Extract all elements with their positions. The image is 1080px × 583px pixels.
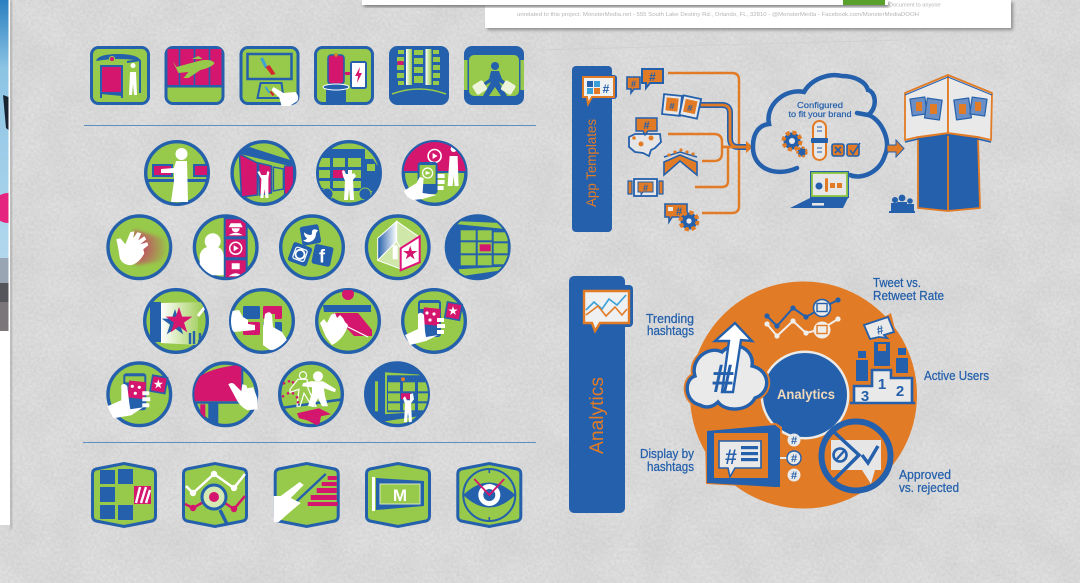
icon: display by hashtags: # [725, 446, 737, 469]
hexagon icon: hand and bars [274, 464, 338, 526]
circle icon: building grid [446, 215, 510, 279]
divider lines [83, 125, 536, 443]
cloud caption [788, 100, 852, 119]
icon: touch screen brush [241, 48, 298, 106]
icon: chat bubbles [627, 69, 663, 93]
circle icon: waving hand [108, 216, 171, 279]
circle icon: bus with person [317, 142, 381, 204]
kiosk tower [905, 75, 992, 211]
labels: analytics metrics [640, 276, 989, 495]
icon: US map with bubble [629, 118, 661, 156]
icon: audience [889, 195, 915, 213]
circle icon: locker wall with person [365, 362, 429, 426]
panel: Analytics sidebar [569, 276, 633, 513]
icon: users podium: 1 [878, 376, 886, 393]
icon: landscape phone: # [643, 183, 648, 193]
icon: bubble and gear: # [676, 206, 682, 218]
labels: analytics metrics: Trending [646, 312, 694, 326]
icon: trending cloud [687, 323, 767, 409]
labels: analytics metrics: hashtags [647, 460, 694, 474]
circle icon: person at large doors [232, 142, 295, 204]
icon: display by hashtags: # [791, 453, 797, 465]
icon: airplane [166, 48, 223, 104]
circle icon: phone with star cards, second [107, 363, 171, 426]
icon: crowd film strip [664, 148, 697, 175]
labels: analytics metrics: Active Users [924, 369, 989, 383]
icon: chat bubbles: # [631, 79, 636, 89]
arrow into cloud [746, 141, 753, 153]
cloud: configured to fit your brand [753, 75, 887, 176]
icon: lockers wall [390, 48, 448, 104]
labels: analytics metrics: Display by [640, 447, 695, 461]
hexagon icon: magnified chart [184, 464, 246, 526]
circle icon: projected star [145, 290, 208, 352]
circle icon: open cube with star panel [366, 216, 429, 279]
icon: approved versus rejected [822, 422, 890, 490]
analytics wheel [687, 282, 917, 508]
icon: display by hashtags: # [791, 435, 797, 447]
icon: trending cloud: # [712, 357, 734, 401]
circle icon: card insert [317, 288, 379, 352]
top documents [362, 0, 1013, 30]
circle icon: social media tiles: f [319, 246, 326, 266]
labels: analytics metrics: Approved [899, 468, 951, 482]
hexagon icon: checker grid [92, 464, 156, 526]
icon: bus shelter [92, 48, 148, 104]
icon: display by hashtags: # [791, 470, 797, 482]
App Templates title: App Templates [583, 119, 599, 207]
icon: display by hashtags [705, 423, 801, 488]
icon: US map with bubble: # [643, 120, 650, 132]
left document edge [0, 0, 12, 530]
Analytics title: Analytics [587, 377, 608, 454]
icon: users podium: # [875, 322, 885, 338]
circle icon: person with video strip [194, 215, 257, 279]
circle icon: social media tiles [281, 216, 343, 279]
icon: polaroid photos: # [687, 103, 693, 113]
icon: landscape phone [628, 179, 663, 196]
circle icon: dancing figures [279, 363, 343, 426]
cloud caption: to fit your brand [788, 109, 852, 119]
circle icon: person at display [145, 142, 209, 204]
icon: laptop [790, 171, 849, 208]
labels: analytics metrics: vs. rejected [899, 481, 959, 495]
panel: App Templates sidebar: # [603, 82, 610, 96]
hexagon icon: eye and clock [458, 464, 521, 526]
circle icon: phone video [403, 141, 467, 204]
arrow to kiosk [887, 140, 904, 157]
hexagon icon: framed M [366, 464, 430, 526]
icon: users podium: 3 [861, 388, 869, 405]
icon: polaroid photos: # [669, 101, 675, 111]
icon: chat bubbles: # [649, 70, 656, 84]
icon: polaroid photos [662, 94, 701, 119]
top documents: Document to anyone [889, 2, 941, 8]
labels: analytics metrics: hashtags [647, 324, 694, 338]
icon: tweet trend lines [764, 297, 841, 339]
icon: kiosk and phone [316, 48, 372, 104]
labels: analytics metrics: Tweet vs. [873, 276, 921, 290]
icon: bubble and gear [665, 204, 698, 230]
icon: walking traveller [464, 46, 524, 105]
wheel centre label: Analytics [777, 386, 835, 402]
circle icon: phone with star cards [403, 290, 465, 352]
top documents: unrelated to this project. MonsterMedia.net - 555 South Lake Destiny Rd., Orlando, FL, 32810 - @MonsterMedia - Facebook.com/MonsterMediaDOOH [517, 12, 919, 18]
icon: users podium: 2 [896, 383, 904, 400]
labels: analytics metrics: Retweet Rate [873, 289, 944, 303]
hexagon icon: framed M: M [393, 486, 407, 505]
cloud caption: Configured [797, 100, 843, 110]
orange connector lines [668, 73, 748, 213]
circle icon: tile swipe with hands [229, 290, 293, 352]
icon: users podium [850, 313, 915, 405]
circle icon: tabletop touch [193, 363, 257, 427]
panel: App Templates sidebar [572, 66, 617, 232]
